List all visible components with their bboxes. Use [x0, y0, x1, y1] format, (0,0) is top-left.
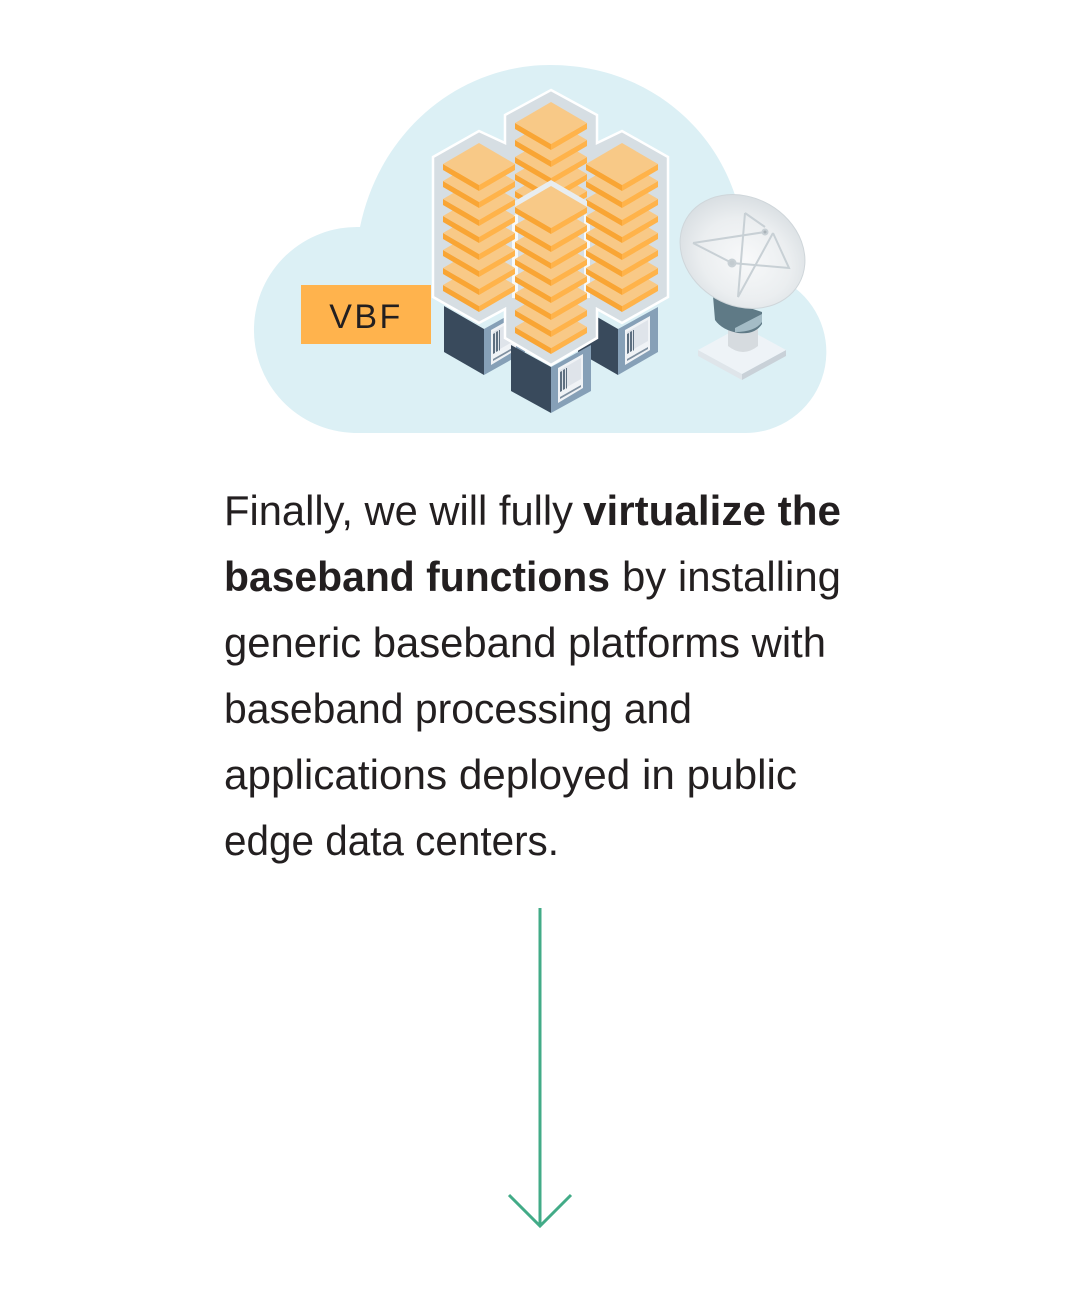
server base: right [578, 306, 658, 375]
line 1: virtualize the [583, 487, 841, 534]
server base: front [511, 345, 591, 413]
illustration: VBF cloud with servers and dish [254, 65, 826, 433]
line 5: applications deployed in public [224, 751, 797, 798]
arrow: down [509, 908, 571, 1226]
icon: satellite dish [659, 172, 826, 380]
server base: left [444, 306, 525, 375]
body text [224, 487, 841, 864]
line 3: generic baseband platforms with [224, 619, 826, 666]
cloud background [254, 65, 826, 433]
VBF label [301, 285, 431, 344]
line 6: edge data centers. [224, 817, 559, 864]
rear tower plates [515, 102, 587, 218]
line 2 [224, 553, 841, 600]
halo behind front tower top [515, 180, 587, 215]
dish bowl [659, 172, 826, 331]
white gaps between towers [512, 215, 590, 298]
line 4: baseband processing and [224, 685, 692, 732]
hexagonal server enclosure [433, 90, 668, 365]
dish mount [713, 296, 762, 333]
dish base [698, 325, 786, 380]
line 2: by installing [622, 553, 841, 600]
line 1 [224, 487, 841, 534]
right tower plates [586, 143, 658, 312]
VBF label: VBF [329, 298, 403, 336]
dish struts [693, 213, 789, 297]
left tower plates [443, 143, 515, 312]
front tower plates [515, 186, 587, 354]
line 2: baseband functions [224, 553, 610, 600]
line 1: Finally, we will fully [224, 487, 573, 534]
